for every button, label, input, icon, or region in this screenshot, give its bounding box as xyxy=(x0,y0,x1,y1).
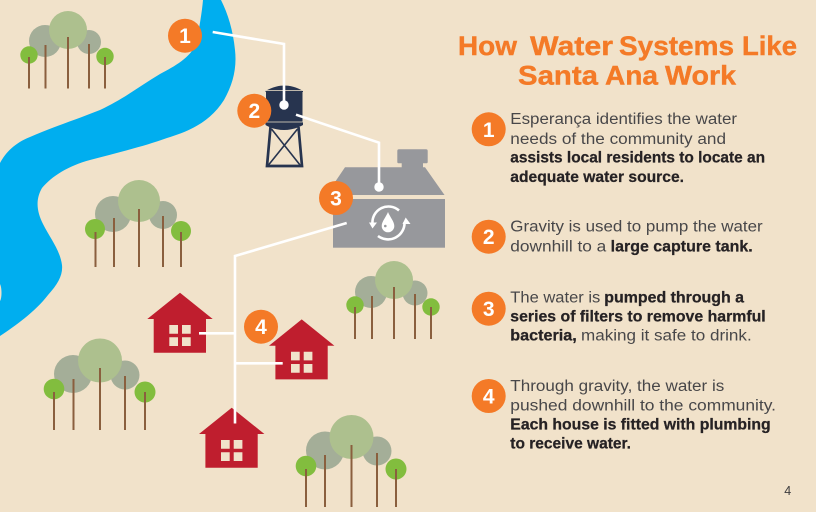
step 3: 3 xyxy=(483,298,495,321)
step 4 xyxy=(472,378,776,452)
house: bottom xyxy=(199,408,264,468)
step 3: series of filters to remove harmful xyxy=(510,308,766,325)
step 4: Through gravity, the water is xyxy=(510,378,725,395)
map marker 2 xyxy=(237,94,271,128)
step 2 xyxy=(472,219,763,256)
step 2: large capture tank. xyxy=(611,239,753,256)
map marker 2: 2 xyxy=(248,100,260,123)
step 3: The water is xyxy=(510,289,601,306)
pipe: tower to tank xyxy=(296,115,384,192)
title: Work xyxy=(665,60,737,90)
step 1: Esperança identifies the water xyxy=(510,111,737,128)
capture tank xyxy=(333,149,445,248)
title: Water xyxy=(530,31,614,61)
step 1: adequate water source. xyxy=(510,169,684,186)
pipe: river to tower xyxy=(213,32,289,110)
map marker 1: 1 xyxy=(179,25,191,48)
step 3: making it safe to drink. xyxy=(581,327,752,344)
step 4: Each house is fitted with plumbing xyxy=(510,416,771,433)
house: right xyxy=(269,319,334,379)
tree cluster: bottom centre xyxy=(296,415,406,507)
map marker 3: 3 xyxy=(330,188,342,210)
step 1: 1 xyxy=(483,119,495,142)
tree cluster: bottom left xyxy=(44,338,156,430)
step 2: downhill to a xyxy=(510,239,607,256)
step 2: 2 xyxy=(483,226,495,249)
title: Like xyxy=(742,31,797,61)
step 3 xyxy=(472,289,766,344)
step 4: 4 xyxy=(483,386,495,408)
step 4: pushed downhill to the community. xyxy=(510,397,776,414)
tree cluster: right xyxy=(346,261,440,339)
page number: 4 xyxy=(784,484,791,498)
title xyxy=(458,31,797,90)
map marker 3 xyxy=(319,181,353,215)
title: How xyxy=(458,31,518,61)
map marker 1 xyxy=(168,19,202,53)
house: left xyxy=(147,293,213,353)
map marker 4: 4 xyxy=(255,316,267,339)
tree cluster: middle left xyxy=(85,180,191,267)
step 4: to receive water. xyxy=(510,435,631,452)
title: Ana xyxy=(605,60,659,90)
step 1: needs of the community and xyxy=(510,131,726,148)
pipe: tank to houses xyxy=(199,223,347,424)
icon: filter cycle with water drop xyxy=(369,207,410,239)
title: Santa xyxy=(518,60,599,90)
step 1 xyxy=(472,111,765,186)
title: Systems xyxy=(619,31,734,61)
step 3: pumped through a xyxy=(604,289,744,306)
step 1: assists local residents to locate an xyxy=(510,150,765,167)
step 2: Gravity is used to pump the water xyxy=(510,219,763,236)
map marker 4 xyxy=(244,310,278,344)
water tower xyxy=(266,86,303,166)
tree cluster: top left xyxy=(20,11,114,88)
step 3: bacteria, xyxy=(510,327,577,344)
river xyxy=(0,0,236,336)
